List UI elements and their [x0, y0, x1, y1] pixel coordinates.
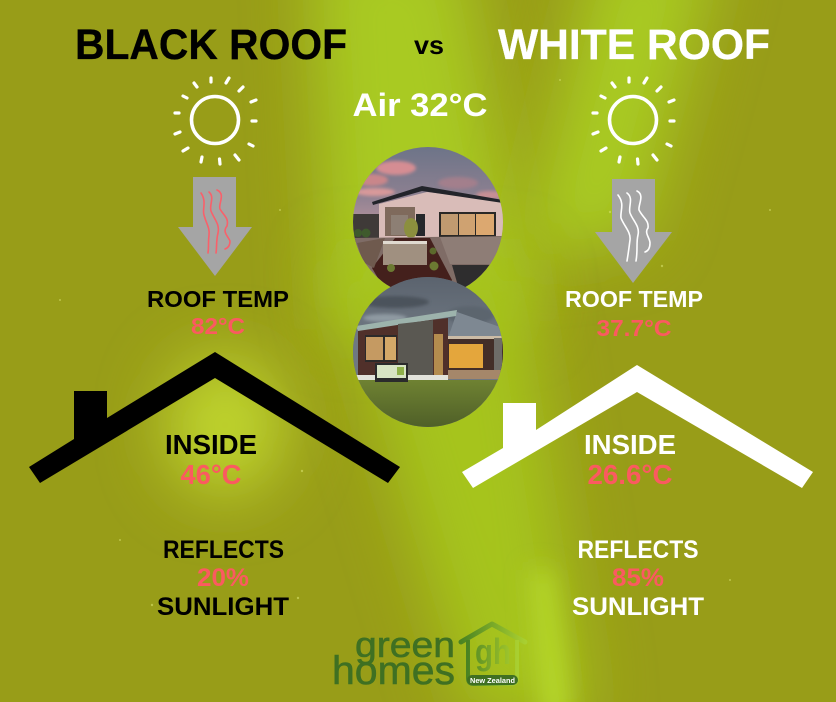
label: left reflectance: REFLECTS	[163, 536, 284, 564]
label: left reflectance: SUNLIGHT	[157, 593, 289, 621]
logo: green homes new zealand: homes	[332, 649, 455, 693]
label: right inside temp	[584, 429, 676, 490]
photo: bottom house	[353, 277, 503, 428]
arrow: left heat arrow	[178, 177, 252, 276]
label: right reflectance: REFLECTS	[578, 536, 698, 564]
logo: green homes new zealand: gh	[475, 631, 511, 672]
label: right inside temp: INSIDE	[584, 429, 676, 460]
title: white roof: WHITE ROOF	[498, 21, 770, 69]
title: black roof: BLACK ROOF	[75, 21, 347, 69]
label: right inside temp: 26.6°C	[588, 459, 672, 490]
label: right reflectance: 85%	[612, 564, 664, 592]
label: right roof temp	[565, 286, 703, 341]
label: right roof temp: 37.7°C	[596, 315, 672, 341]
black roof shape	[29, 352, 400, 483]
label: right reflectance	[572, 536, 704, 621]
logo: green homes new zealand	[332, 624, 525, 693]
label: right reflectance: SUNLIGHT	[572, 593, 704, 621]
label: left inside temp: 46°C	[180, 459, 242, 490]
vs label: vs	[414, 30, 444, 60]
label: right roof temp: ROOF TEMP	[565, 286, 703, 312]
arrow: right heat arrow	[595, 179, 672, 283]
photo: top house	[353, 147, 504, 300]
label: left reflectance: 20%	[197, 564, 249, 592]
icon: left sun	[175, 78, 256, 164]
label: left inside temp	[165, 429, 257, 490]
label: left reflectance	[157, 536, 289, 621]
label: left roof temp: 82°C	[191, 313, 245, 339]
air temperature label: Air 32°C	[352, 87, 488, 123]
logo: green homes new zealand: green	[355, 624, 455, 665]
label: left roof temp: ROOF TEMP	[147, 286, 289, 312]
white roof shape	[462, 365, 813, 488]
label: left inside temp: INSIDE	[165, 429, 257, 460]
label: left roof temp	[147, 286, 289, 339]
logo: green homes new zealand: New Zealand	[470, 676, 515, 685]
icon: right sun	[593, 78, 674, 164]
